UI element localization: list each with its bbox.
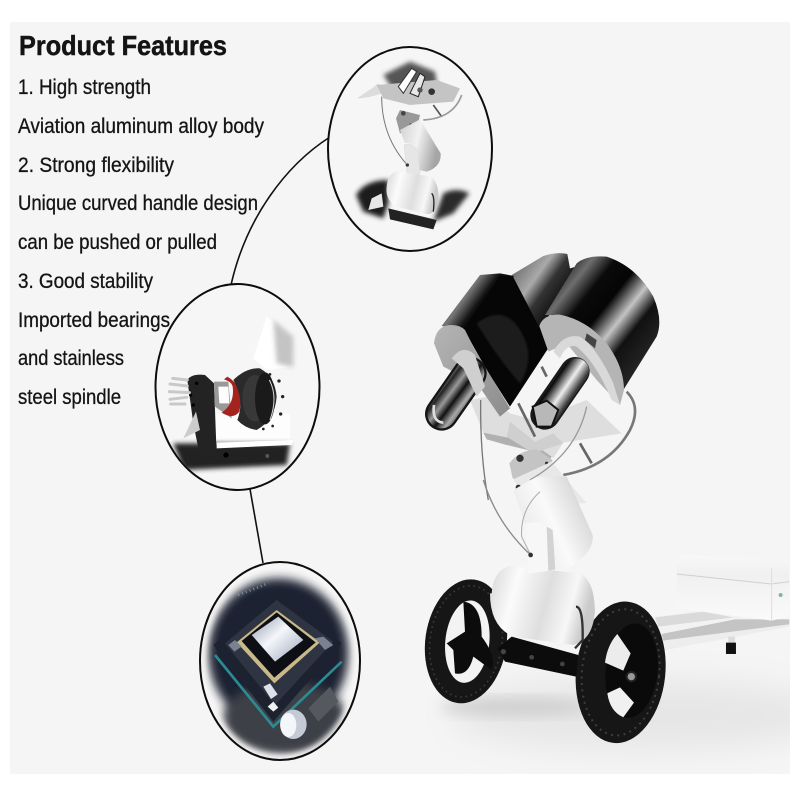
title: Product Features bbox=[19, 30, 227, 61]
left tube bbox=[442, 373, 470, 414]
left barrel top bbox=[442, 273, 514, 330]
connector: bearing circle to chip circle bbox=[250, 489, 263, 563]
lower body: wheels, tank, arm and box bbox=[417, 477, 789, 748]
feature 3 heading: 3. Good stability bbox=[18, 270, 153, 293]
right barrel bbox=[545, 256, 659, 390]
detail circle: control chip bbox=[200, 562, 360, 760]
electrical box bbox=[677, 555, 789, 621]
rail foot bbox=[728, 637, 735, 643]
upper head: dual barrels bbox=[434, 253, 659, 503]
guard ring bbox=[563, 392, 635, 475]
joint bbox=[509, 449, 553, 482]
left end plate bbox=[434, 325, 510, 417]
ground shadow bbox=[440, 679, 800, 751]
tank bbox=[490, 566, 595, 645]
feature 2 heading: 2. Strong flexibility bbox=[18, 154, 174, 177]
detail circle: curved handle bbox=[328, 47, 492, 251]
right end plate bbox=[539, 315, 624, 405]
feature 3 text line 3: steel spindle bbox=[18, 386, 121, 409]
feature 1 heading: 1. High strength bbox=[18, 76, 151, 99]
right wheel bbox=[569, 597, 672, 748]
feature 3 text line 2: and stainless bbox=[18, 347, 124, 370]
rail bbox=[655, 611, 789, 649]
cable to arm bbox=[483, 480, 531, 555]
arm pipe bbox=[527, 522, 555, 574]
handle pins bbox=[518, 367, 592, 463]
detail circle: bearing and spindle bbox=[156, 284, 320, 490]
cables bbox=[481, 400, 488, 500]
left wheel bbox=[417, 574, 515, 709]
back barrel bbox=[512, 253, 578, 350]
feature 2 text line 2: can be pushed or pulled bbox=[18, 231, 217, 254]
arm upper bbox=[513, 477, 593, 569]
connector: handle circle to bearing circle bbox=[231, 137, 330, 285]
feature 1 text: Aviation aluminum alloy body bbox=[18, 115, 264, 138]
product photo: robot on wheeled base bbox=[417, 253, 789, 748]
feature list bbox=[18, 76, 264, 409]
left barrel face bbox=[463, 276, 549, 407]
axle bar bbox=[497, 637, 578, 677]
feature 3 text line 1: Imported bearings bbox=[18, 309, 170, 332]
lower bracket bbox=[470, 397, 622, 458]
feature 2 text line 1: Unique curved handle design bbox=[18, 192, 258, 215]
right tube bbox=[545, 372, 575, 415]
